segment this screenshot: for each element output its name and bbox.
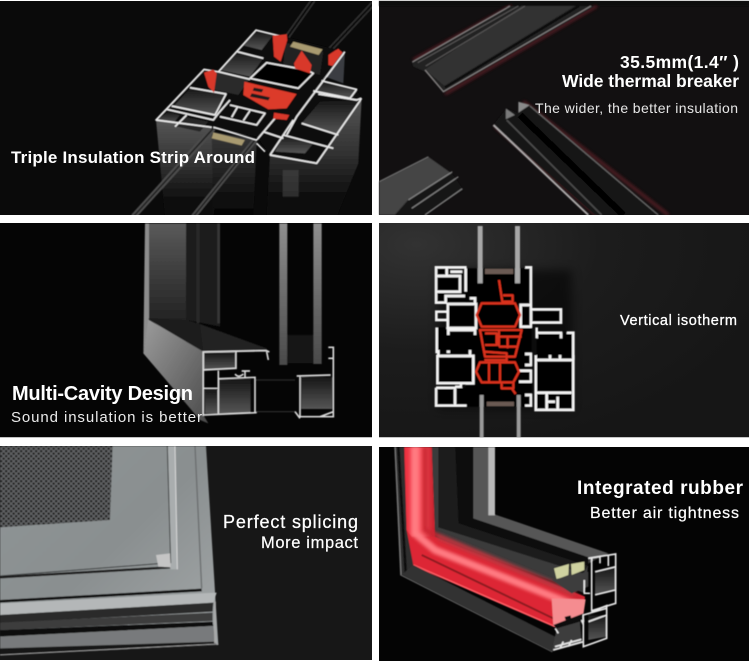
panel 2 artwork: thermal breaker strips [379,1,749,215]
panel 6 artwork: frame corner with red rubber gasket [379,447,749,661]
heading: triple insulation: Triple Insulation Strip Around [11,148,255,167]
panel: wide thermal breaker [379,1,749,215]
panel 5 artwork: mitred corner with perforated screen [0,446,372,660]
panel: vertical isotherm [379,223,749,438]
heading: multi-cavity design: Multi-Cavity Design [12,383,193,405]
heading: vertical isotherm: Vertical isotherm [620,313,737,329]
panel: multi-cavity design [0,223,372,437]
heading: wide thermal breaker: Wide thermal breaker [562,71,739,91]
text: wider better insulation: The wider, the better insulation [535,100,738,116]
panel: perfect splicing [0,446,372,660]
panel: integrated rubber [379,447,749,661]
panel 3 artwork: window frame corner [0,223,372,437]
text: better air tightness: Better air tightness [590,505,739,522]
heading: 35.5mm dimension: 35.5mm(1.4″ ) [620,52,739,72]
heading: integrated rubber: Integrated rubber [577,478,744,499]
panel 1 artwork: cross-section of window profile [0,0,373,217]
text: more impact: More impact [261,534,358,552]
panel 4 artwork: isotherm cross-section diagram [379,223,749,438]
panel: triple insulation strip [0,0,373,217]
heading: perfect splicing: Perfect splicing [223,512,358,532]
text: sound insulation: Sound insulation is better [11,409,202,426]
